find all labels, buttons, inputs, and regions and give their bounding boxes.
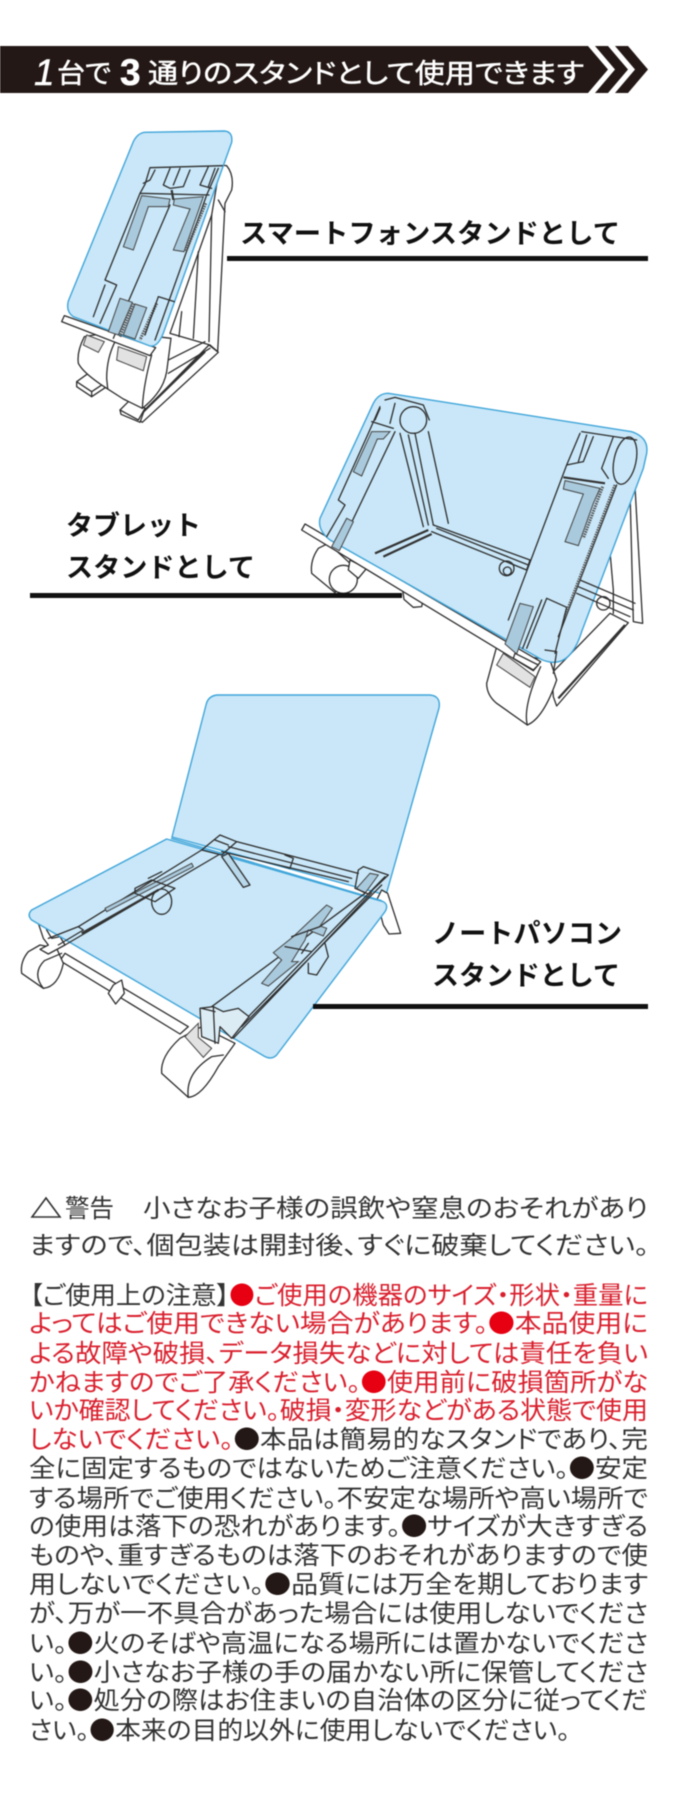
notes line 11: 用しないでください。 ●品質には万全を期しております	[29, 1565, 648, 1601]
device panel	[68, 131, 232, 346]
label text: ノートパソコン	[432, 912, 622, 951]
banner text: 通りのスタンドとして使用できます	[148, 52, 584, 91]
warning label: 警告	[65, 1189, 114, 1225]
notes line 4: かねますのでご了承ください。 ●使用前に破損箇所がな	[29, 1363, 648, 1399]
left foot	[311, 543, 350, 593]
notes line 5: いか確認してください。破損・変形などがある状態で使用	[29, 1391, 648, 1427]
notes line 14: い。●小さなお子様の手の届かない所に保管してくださ	[29, 1653, 648, 1689]
right foot	[162, 1027, 235, 1097]
hinge line	[171, 838, 382, 901]
label text: スマートフォンスタンドとして	[240, 212, 620, 251]
center clip	[403, 578, 423, 607]
stand body	[78, 332, 171, 408]
illustration: tablet stand	[302, 393, 647, 725]
right foot	[487, 647, 557, 725]
illustration: laptop stand	[21, 695, 439, 1097]
slots	[123, 196, 170, 250]
leader line	[30, 593, 402, 598]
left clip	[38, 923, 65, 954]
label: tablet stand	[30, 504, 402, 598]
left wheel	[21, 945, 63, 988]
rear cross bars	[577, 580, 635, 617]
label: laptop stand	[313, 912, 648, 1009]
label: smartphone stand	[227, 212, 648, 261]
label text: タブレット	[66, 504, 201, 543]
notes line 13: い。●火のそばや高温になる場所には置かないでくださ	[29, 1624, 648, 1660]
notes line 12: が、万が一不具合があった場合には使用しないでくださ	[29, 1594, 648, 1630]
illustration: smartphone stand	[62, 131, 232, 422]
leader line	[313, 1004, 648, 1009]
icon: warning triangle	[32, 1198, 60, 1217]
notes line 6: しないでください。 ●本品は簡易的なスタンドであり、完	[29, 1420, 648, 1456]
notes line 1: 【ご使用上の注意】●ご使用の機器のサイズ・形状・重量に	[30, 1276, 648, 1312]
label: tablet stand: スタンドとして	[66, 546, 255, 585]
banner text: 1	[34, 52, 55, 93]
right arm	[609, 435, 641, 486]
notes line 2: よってはご使用できない場合があります。 ●本品使用に	[29, 1304, 648, 1340]
banner text: 台で	[57, 52, 111, 91]
notes line 16: さい。●本来の目的以外に使用しないでください。	[29, 1711, 570, 1747]
notes line 7: 全に固定するものではないためご注意ください。 ●安定	[29, 1449, 648, 1485]
stand seen through laptop	[48, 835, 388, 1043]
leader line	[227, 256, 648, 261]
front rail	[60, 953, 188, 1034]
banner chevrons	[595, 46, 648, 93]
label: laptop stand: スタンドとして	[432, 954, 620, 993]
gray pads	[83, 335, 104, 352]
warning line 1: 小さなお子様の誤飲や窒息のおそれがあり	[143, 1189, 648, 1225]
notes line 3: よる故障や破損、データ損失などに対しては責任を負い	[29, 1334, 648, 1370]
struts	[400, 432, 448, 527]
lower rail	[552, 613, 628, 706]
back leg	[170, 165, 232, 352]
banner heading	[0, 46, 648, 93]
banner text: 3	[120, 52, 141, 93]
notes line 10: ものや、重すぎるものは落下のおそれがありますので使	[29, 1536, 648, 1572]
laptop base	[29, 839, 387, 1058]
left arm	[400, 407, 427, 433]
laptop screen	[172, 695, 439, 895]
feet	[77, 373, 107, 397]
usage notes text block	[29, 1276, 648, 1747]
banner band	[0, 46, 608, 93]
ledge detail	[513, 653, 538, 670]
notes line 15: い。●処分の際はお住まいの自治体の区分に従ってくだ	[29, 1681, 648, 1717]
front ledge	[302, 524, 541, 671]
device panel	[320, 393, 647, 662]
stand seen through device	[327, 397, 641, 673]
front ledge	[62, 316, 156, 356]
notes line 9: の使用は落下の恐れがあります。 ●サイズが大きすぎる	[29, 1507, 648, 1543]
warning text block	[29, 1189, 649, 1262]
right rear leg	[377, 890, 401, 934]
base rail	[137, 345, 218, 422]
back leg	[607, 487, 643, 623]
banner text	[34, 52, 584, 93]
notes line 8: する場所でご使用ください。不安定な場所や高い場所で	[29, 1479, 648, 1515]
stand seen through device	[93, 166, 222, 340]
warning line 2: ますので、個包装は開封後、すぐに破棄してください。	[29, 1226, 649, 1262]
